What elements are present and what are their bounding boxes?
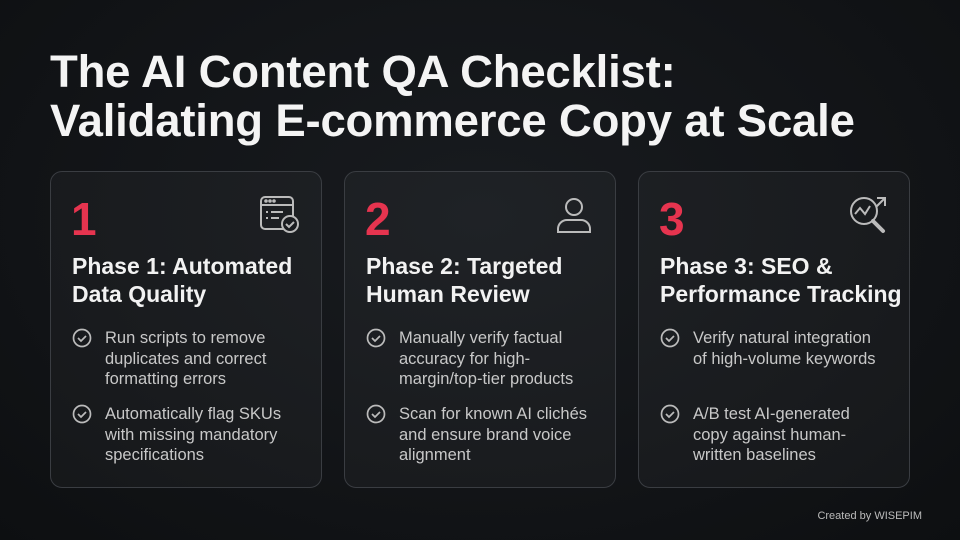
heading: Human Review [366, 281, 530, 307]
heading: Performance Tracking [660, 281, 902, 307]
bullet 2: Automatically flag SKUs with missing mandatory specifications [105, 405, 281, 464]
number 2: 2 [365, 193, 391, 245]
number 1: 1 [71, 193, 97, 245]
bullet 2: Scan for known AI clichés and ensure brand voice alignment [399, 405, 587, 464]
heading: Phase 1: Automated [72, 253, 292, 279]
icon: analytics magnifier [850, 197, 886, 234]
panel: phase 2 [344, 171, 616, 488]
heading [660, 253, 902, 307]
heading: Data Quality [72, 281, 206, 307]
bullet 1: Verify natural integration of high-volume keywords [693, 329, 876, 368]
icon: checklist browser [260, 196, 299, 233]
panel: phase 1 [50, 171, 322, 488]
heading [72, 253, 292, 307]
heading: Phase 3: SEO & [660, 253, 833, 279]
panel: phase 3 [638, 171, 910, 488]
bullet 1: Run scripts to remove duplicates and correct formatting errors [105, 329, 266, 388]
title [50, 46, 855, 146]
heading: Phase 2: Targeted [366, 253, 562, 279]
icon: person [557, 198, 591, 233]
number 3: 3 [659, 193, 685, 245]
heading [366, 253, 562, 307]
footer credit: Created by WISEPIM [817, 510, 922, 522]
bullet 1: Manually verify factual accuracy for high-margin/top-tier products [399, 329, 573, 388]
bullet 2: A/B test AI-generated copy against human-written baselines [693, 405, 850, 464]
title: Validating E-commerce Copy at Scale [50, 95, 855, 146]
title: The AI Content QA Checklist: [50, 46, 676, 97]
